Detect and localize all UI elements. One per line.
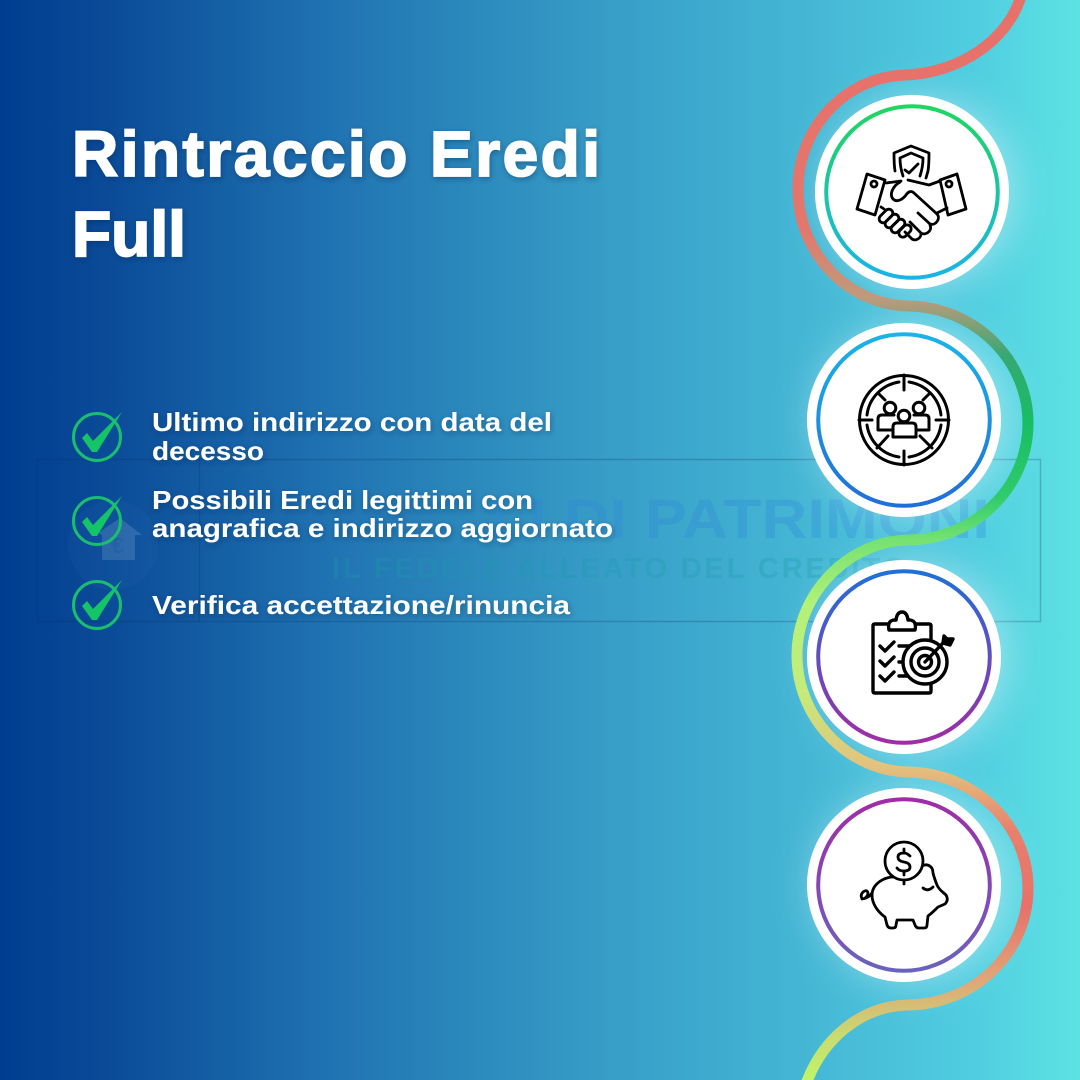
icon: check 1 [74,412,122,460]
title: Full [72,198,186,270]
text: item 1: Ultimo indirizzo con data del [152,407,552,437]
glow behind circles [816,96,1016,981]
title [72,118,600,270]
icon: handshake with shield [857,146,966,240]
icon: check 3 [74,580,122,628]
title: Rintraccio Eredi [72,118,600,190]
text: item 2 [152,485,613,543]
circle: piggy bank [807,788,1001,982]
text: item 2: anagrafica e indirizzo aggiornato [152,513,613,543]
circle: target group [807,323,1001,517]
serpentine line [797,0,1028,1080]
text: item 1: decesso [152,436,264,466]
checklist [74,407,613,628]
icon: clipboard and dart [873,612,953,693]
text: item 3: Verifica accettazione/rinuncia [152,590,571,620]
text: item 1 [152,407,552,466]
icon: piggy bank and coin [861,842,947,928]
watermark logo: € [112,533,124,558]
item: verifica [74,580,571,628]
item: possibili eredi [74,485,613,544]
icon: people in target [859,375,949,465]
circle: handshake [815,95,1009,289]
item: ultimo indirizzo [74,407,552,466]
text: item 2: Possibili Eredi legittimi con [152,485,533,515]
circle: clipboard target [807,560,1001,754]
watermark logo [38,460,1040,622]
watermark logo: LI DI PATRIMONI [490,487,990,550]
watermark logo: IL FEDELE ALLEATO DEL CREDITO [332,553,905,585]
icon: check 2 [74,496,122,544]
